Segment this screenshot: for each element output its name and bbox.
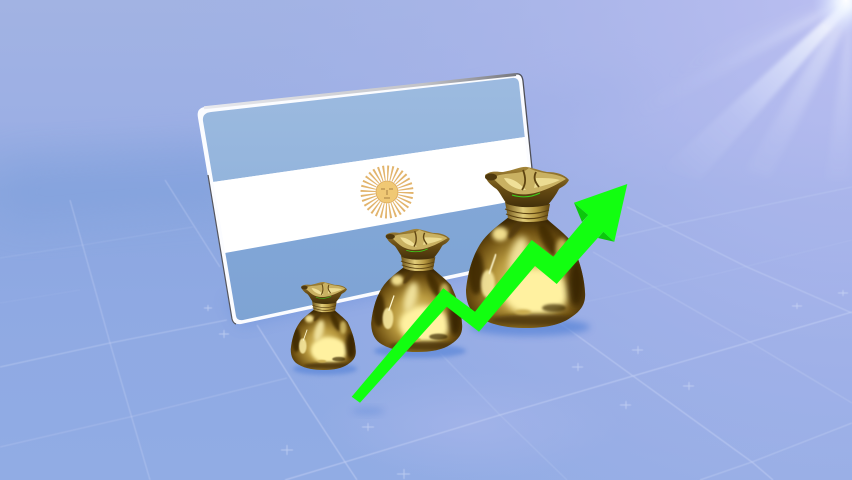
floor sparkles bbox=[204, 290, 848, 479]
shadows under flag and bags bbox=[225, 255, 590, 415]
Argentina flag card bbox=[195, 70, 545, 330]
sun of May bbox=[368, 173, 406, 211]
light rays: top right bbox=[600, 0, 852, 180]
arrow: rising green trend bbox=[352, 184, 627, 403]
money bag: small bbox=[291, 282, 356, 370]
floor grid lines bbox=[0, 180, 852, 480]
money bag: large bbox=[466, 167, 585, 328]
flag stripes bbox=[202, 78, 525, 320]
card frame bbox=[198, 74, 541, 324]
money bag: medium bbox=[371, 229, 462, 352]
